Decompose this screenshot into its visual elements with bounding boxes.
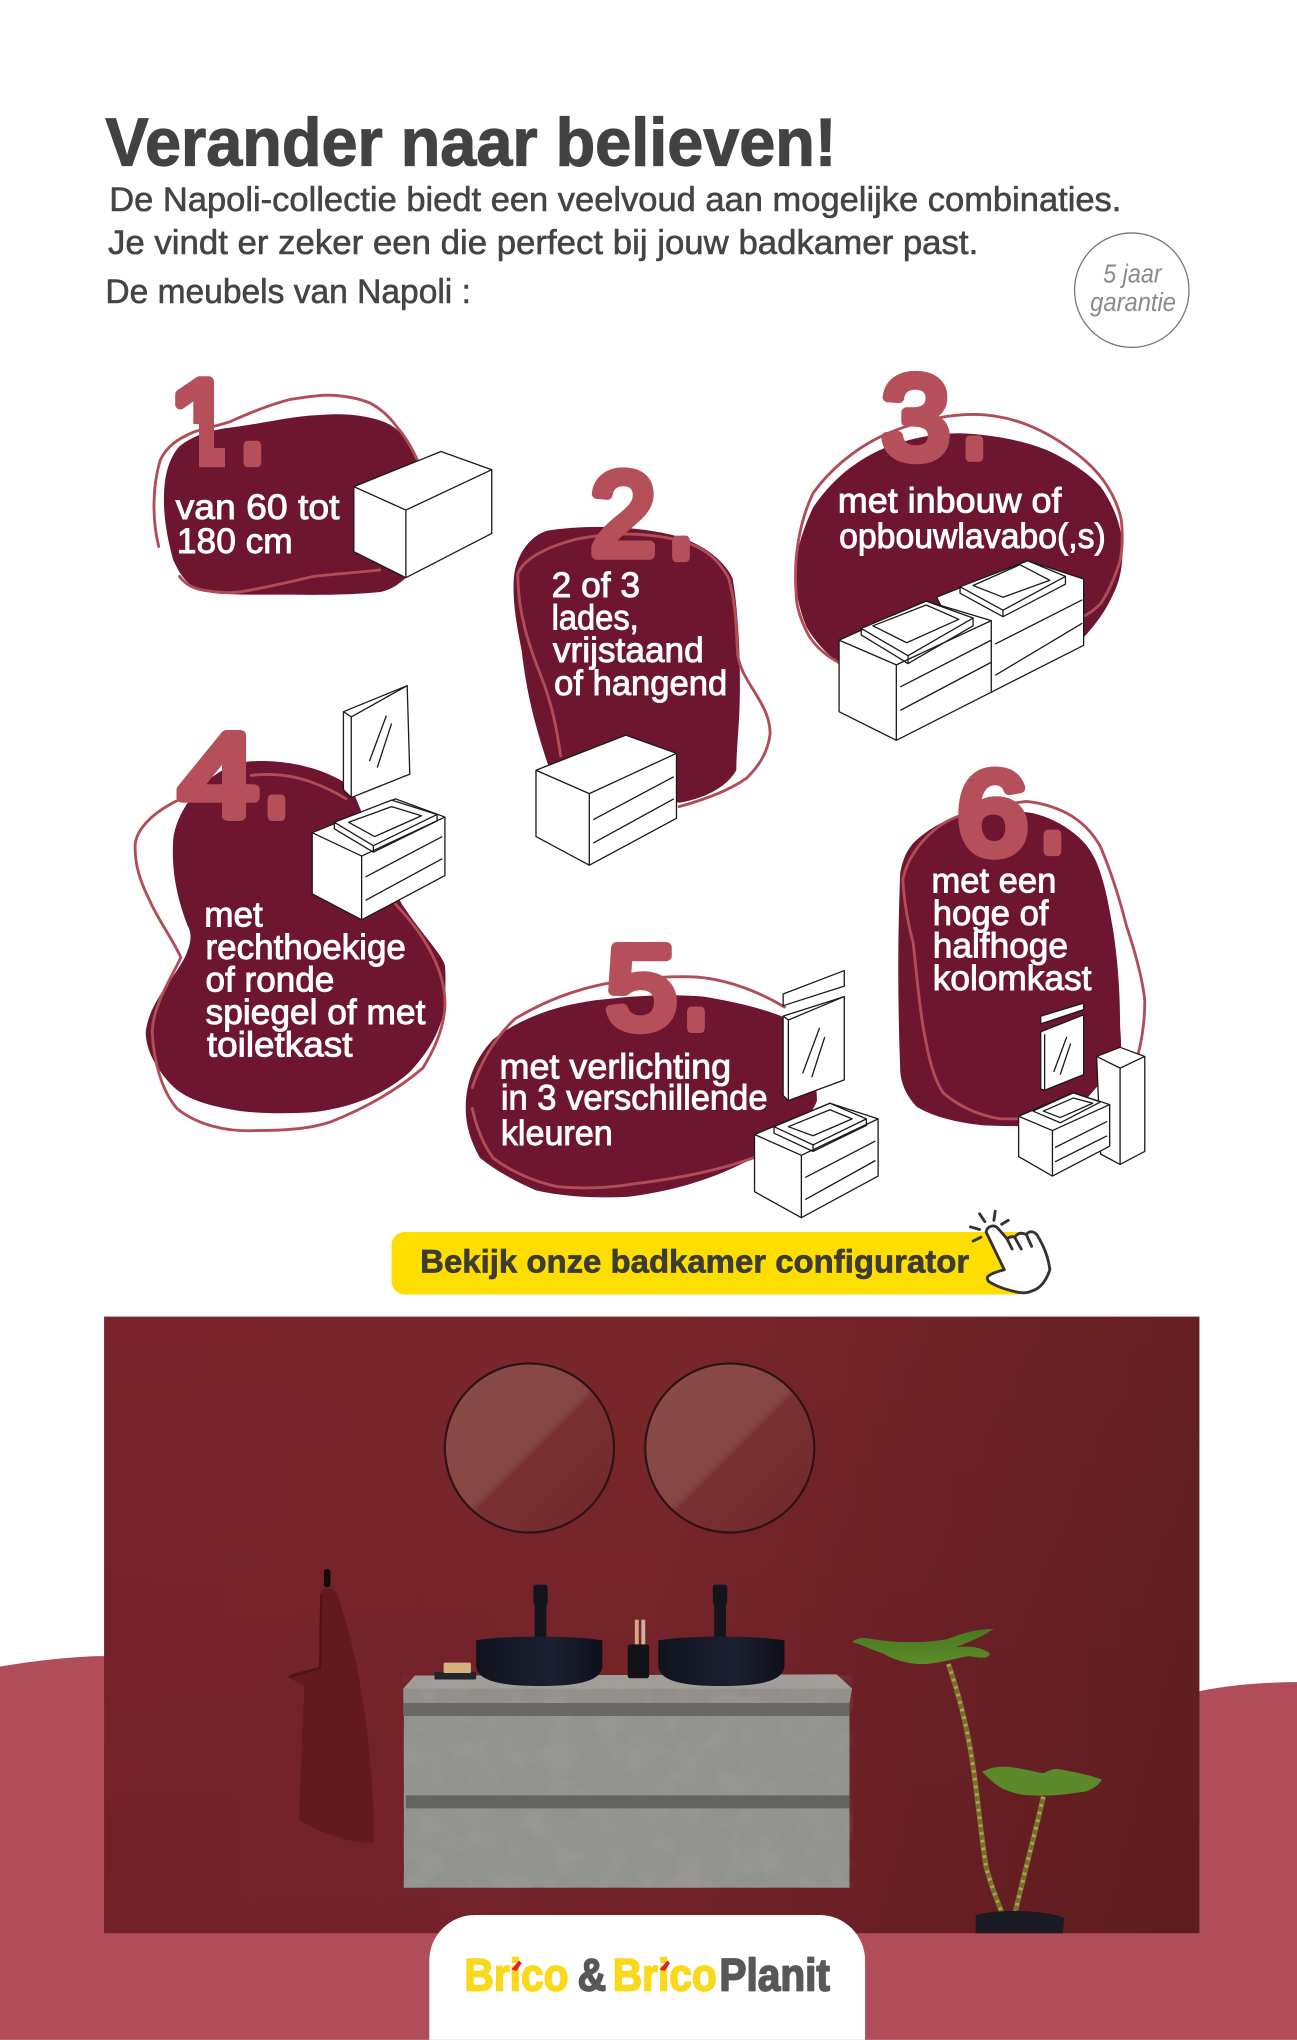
text 2 — [552, 566, 727, 703]
text 5: in 3 verschillende — [501, 1079, 768, 1118]
text 1: 180 cm — [177, 522, 293, 561]
plant — [852, 1629, 1102, 1933]
number 1: 1 — [169, 356, 234, 487]
number 3: 3 — [882, 352, 950, 483]
text 3 — [838, 482, 1106, 556]
text 4: toiletkast — [207, 1025, 353, 1064]
number 2: 2 — [591, 448, 656, 579]
text 2: vrijstaand — [553, 631, 704, 670]
panel 1: van 60 tot 180 cm — [152, 376, 492, 595]
text 2: of hangend — [554, 664, 727, 703]
number 5: 5 — [606, 922, 676, 1053]
number 2: . — [666, 422, 696, 589]
taps — [533, 1585, 727, 1639]
text 3: met inbouw of — [838, 482, 1062, 521]
icon: mirror and cabinet with basin — [312, 686, 445, 920]
toothbrush cup — [628, 1620, 649, 1678]
intro line 1: De Napoli-collectie biedt een veelvoud aan mogelijke combinaties. — [109, 181, 1121, 219]
panel 6: kolomkast — [898, 716, 1145, 1176]
number 1: . — [237, 327, 267, 494]
panel 2: 2 of 3 lades — [514, 422, 770, 865]
icon: three drawer cabinet — [536, 735, 676, 865]
text 6: kolomkast — [933, 959, 1092, 998]
round mirrors — [445, 1363, 814, 1533]
basins — [476, 1637, 784, 1686]
logo: Brico & BricoPlanit: & — [578, 1949, 606, 2000]
badge: 5 jaar garantie — [1075, 233, 1189, 347]
text 6 — [931, 862, 1092, 998]
towel — [287, 1569, 374, 1843]
text 4: rechthoekige — [206, 928, 406, 967]
logo: Brico & BricoPlanit: Planit — [719, 1949, 830, 2000]
text 5 — [500, 1048, 768, 1153]
number 4: 4 — [180, 710, 258, 841]
badge: 5 jaar garantie: garantie — [1090, 287, 1176, 317]
text 5: met verlichting — [500, 1048, 731, 1087]
text 2: lades, — [552, 599, 639, 638]
panel 3: inbouw of opbouwlavabo — [795, 322, 1123, 740]
title: Verander naar believen! — [105, 105, 836, 180]
text 2: 2 of 3 — [552, 566, 640, 605]
number 6: 6 — [957, 747, 1028, 878]
number 1 — [175, 376, 262, 468]
text 4 — [204, 895, 426, 1064]
background wave — [0, 1656, 1297, 2040]
logo: Brico & BricoPlanit: Brico — [464, 1949, 568, 2000]
icon: double cabinet with basins — [839, 561, 1084, 740]
number 5: . — [681, 893, 711, 1060]
vanity cabinet — [403, 1674, 852, 1888]
panel 4: spiegel of toiletkast — [135, 681, 445, 1131]
logo: Brico & BricoPlanit — [464, 1949, 830, 2000]
panel 5: verlichting — [466, 893, 878, 1218]
text 4: spiegel of met — [206, 993, 426, 1032]
number 3: . — [959, 322, 989, 489]
logo tab — [429, 1915, 865, 2040]
button: configurator: Bekijk onze badkamer configurator — [420, 1243, 970, 1279]
photo: bathroom scene — [104, 1317, 1199, 1933]
text 4: of ronde — [206, 960, 334, 999]
text 4: met — [204, 895, 263, 934]
text 5: kleuren — [501, 1114, 613, 1153]
number 2 — [591, 422, 696, 589]
button: configurator — [392, 1232, 1030, 1294]
number 6 — [957, 716, 1067, 883]
text 1: van 60 tot — [176, 488, 340, 527]
number 5 — [606, 893, 711, 1060]
text 3: opbouwlavabo(,s) — [839, 517, 1106, 556]
intro line 2: Je vindt er zeker een die perfect bij jouw badkamer past. — [108, 224, 978, 262]
soap — [435, 1663, 476, 1680]
badge: 5 jaar garantie: 5 jaar — [1103, 258, 1163, 288]
number 4 — [180, 681, 291, 848]
text 6: halfhoge — [933, 927, 1068, 966]
number 6: . — [1037, 716, 1067, 883]
sub heading: De meubels van Napoli : — [105, 273, 471, 311]
icon: pointing hand — [970, 1211, 1050, 1293]
icon: plain cabinet — [354, 452, 492, 578]
text 6: met een — [931, 862, 1056, 901]
text 6: hoge of — [933, 894, 1049, 933]
icon: column, mirror and cabinet — [1019, 1003, 1145, 1176]
number 3 — [882, 322, 989, 489]
logo: Brico & BricoPlanit: Brico — [613, 1949, 717, 2000]
text 1 — [176, 488, 340, 561]
number 4: . — [261, 681, 291, 848]
icon: mirror with light and cabinet — [755, 971, 878, 1218]
